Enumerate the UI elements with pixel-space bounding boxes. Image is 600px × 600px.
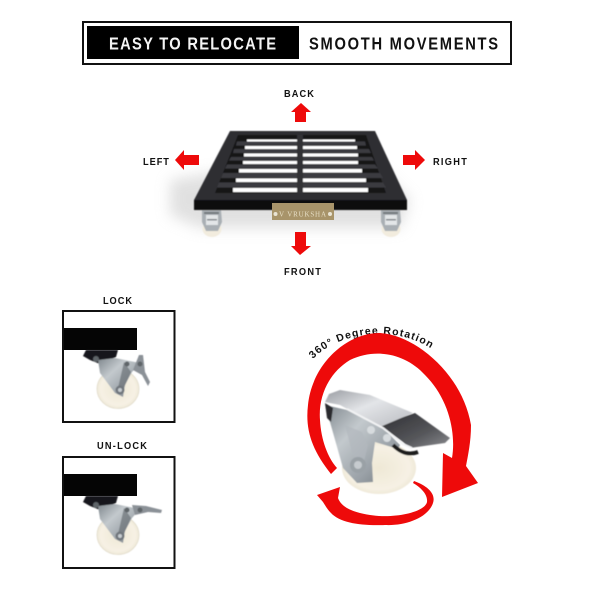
arrow: right [403,150,425,170]
small red base arrow [317,481,434,525]
large red rotation arrow [307,333,478,497]
rotation diagram [307,326,478,526]
label: lock: LOCK [103,296,133,307]
planter trolley photo [170,131,410,237]
header highlight: easy to relocate [87,26,299,59]
label: right: RIGHT [433,157,467,168]
arrow: left [175,150,199,170]
arrow: front [291,232,311,255]
label: back: BACK [284,89,315,100]
label: front: FRONT [284,267,321,278]
unlocked caster [83,496,162,554]
right caster [381,210,401,237]
label: left: LEFT [143,157,169,168]
panel: un-lock [63,457,174,568]
brass name plate: V VRUKSHA [279,210,326,218]
header banner [83,22,511,64]
header highlight: easy to relocate: EASY TO RELOCATE [109,34,276,54]
panel: lock [63,311,174,422]
label: un-lock: UN-LOCK [97,441,148,452]
arrow: back [291,103,311,122]
trolley frame [194,131,407,210]
large caster wheel photo [325,390,450,494]
locked caster [83,350,150,408]
header text: smooth movements: SMOOTH MOVEMENTS [309,34,498,54]
left caster [202,210,222,237]
trolley edge [64,474,137,496]
brass name plate [272,203,334,220]
trolley edge [64,328,137,350]
curved label: 360 degree rotation: 360° Degree Rotation [309,326,432,358]
